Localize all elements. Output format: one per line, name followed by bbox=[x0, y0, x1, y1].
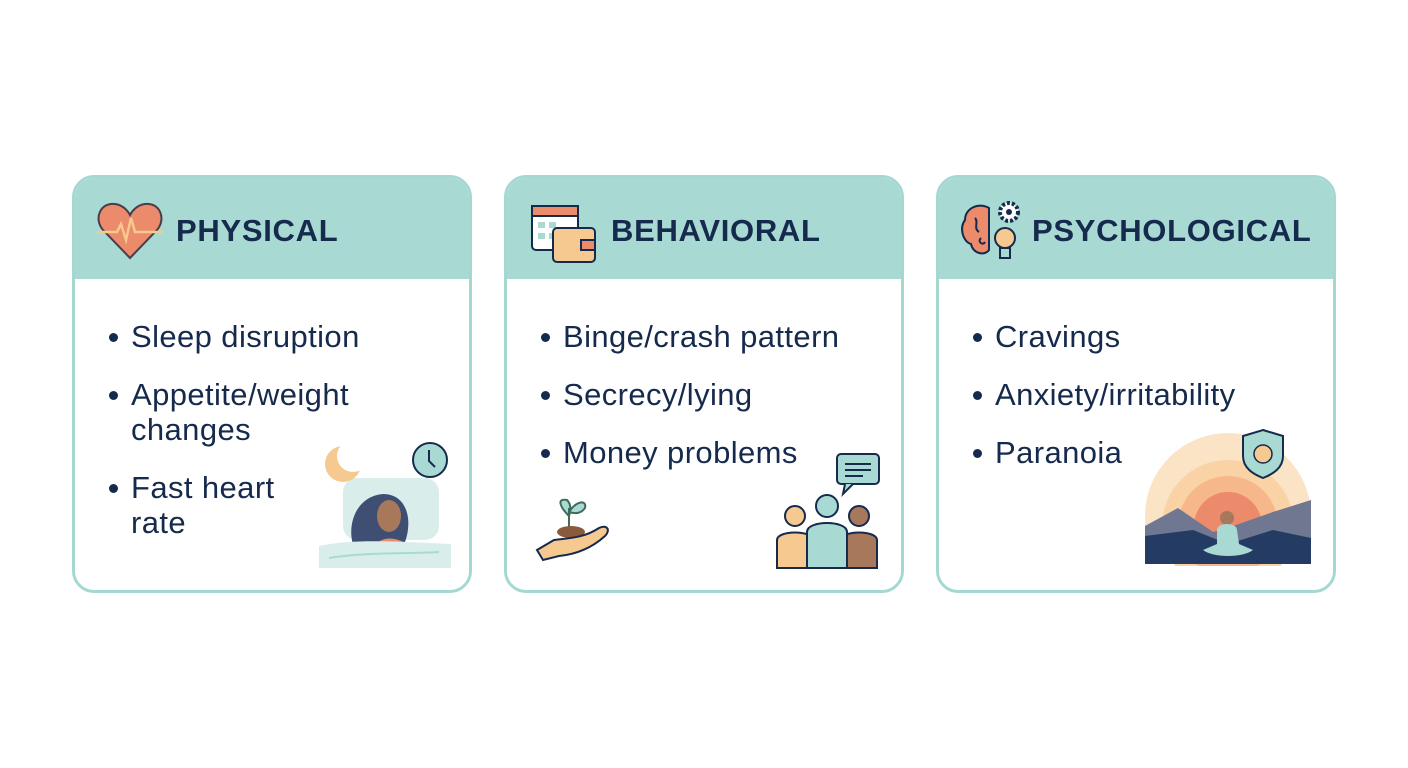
icon: heart bbox=[97, 202, 163, 260]
icon: brain gear bulb bbox=[961, 201, 1020, 259]
panel: psychological: Cravings bbox=[995, 319, 1121, 354]
heading: PSYCHOLOGICAL bbox=[1032, 213, 1312, 248]
panel: psychological bbox=[936, 175, 1336, 593]
panel: physical: Fast heart bbox=[131, 470, 275, 505]
panel: physical: rate bbox=[131, 505, 186, 540]
panel: behavioral: Secrecy/lying bbox=[563, 377, 753, 412]
panel: physical bbox=[72, 175, 472, 593]
icon: hand with plant bbox=[536, 498, 609, 562]
header: behavioral bbox=[507, 178, 901, 279]
panel: physical: Sleep disruption bbox=[131, 319, 360, 354]
list: behavioral bbox=[541, 319, 839, 470]
illustration: meditation sunrise bbox=[1145, 429, 1311, 566]
panel: behavioral: Binge/crash pattern bbox=[563, 319, 839, 354]
heading: PHYSICAL bbox=[176, 213, 338, 248]
header: psychological bbox=[939, 178, 1333, 279]
panel: physical: changes bbox=[131, 412, 251, 447]
heading: BEHAVIORAL bbox=[611, 213, 821, 248]
panel: behavioral: Money problems bbox=[563, 435, 798, 470]
header: physical bbox=[75, 178, 469, 279]
icon: calendar and wallet bbox=[531, 205, 596, 263]
list: physical bbox=[109, 319, 360, 540]
illustration: sleeping woman bbox=[319, 442, 451, 568]
list: psychological bbox=[973, 319, 1236, 470]
panel: physical: Appetite/weight bbox=[131, 377, 349, 412]
panel: psychological: Paranoia bbox=[995, 435, 1122, 470]
icon: group of people with speech bubble bbox=[776, 453, 880, 569]
panel: behavioral bbox=[504, 175, 904, 593]
panel: psychological: Anxiety/irritability bbox=[995, 377, 1236, 412]
